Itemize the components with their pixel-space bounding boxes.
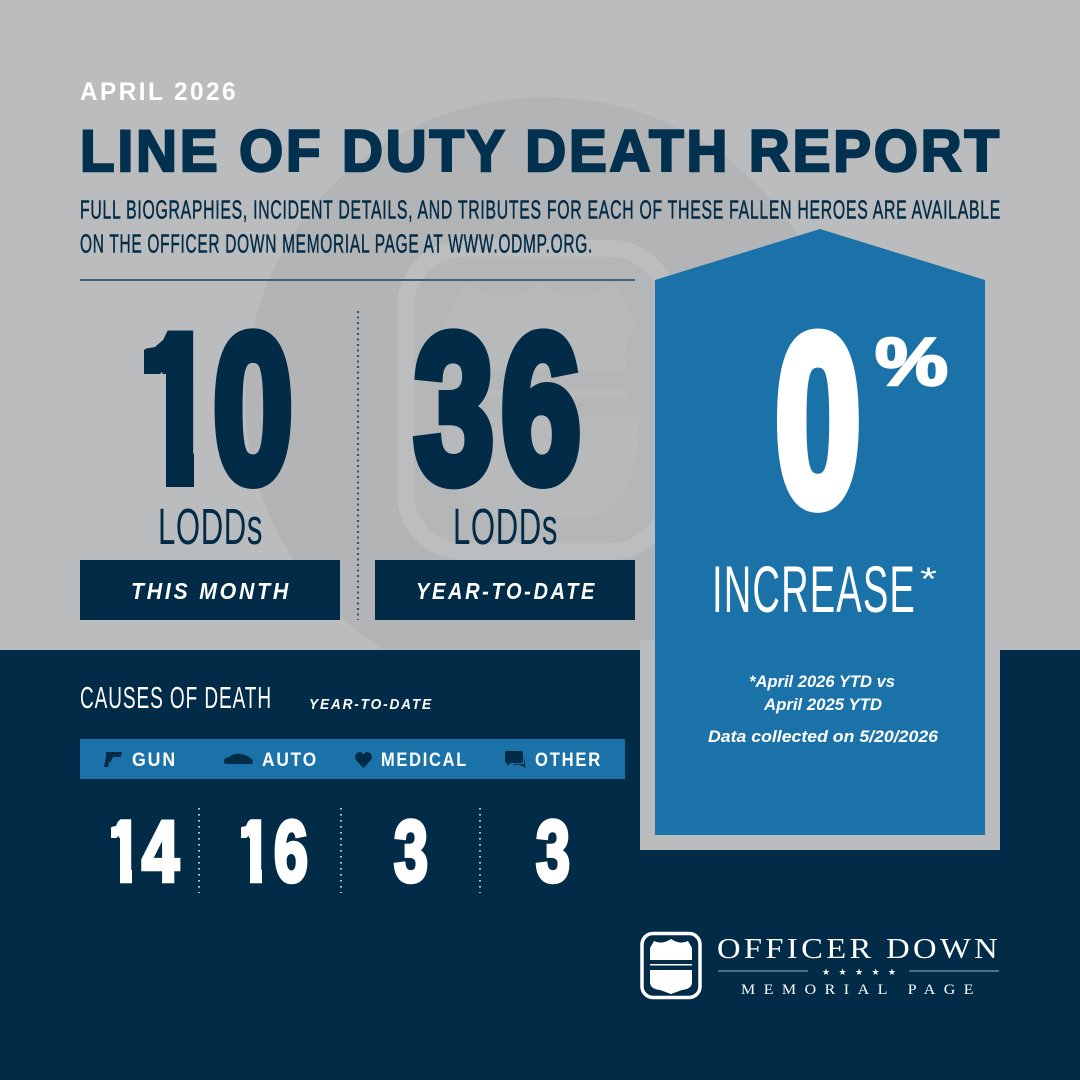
causes legend bar bbox=[80, 739, 625, 779]
watermark: badge emblem bbox=[245, 97, 845, 697]
panel backing bbox=[640, 640, 1000, 850]
logo: OFFICER DOWN bbox=[717, 933, 1001, 965]
causes counts: 3 bbox=[536, 804, 570, 900]
causes heading: CAUSES OF DEATH bbox=[80, 680, 272, 715]
stat: this month: THIS MONTH bbox=[131, 578, 291, 604]
intro text bbox=[80, 194, 1001, 258]
stat: year-to-date: 6 bbox=[501, 291, 581, 526]
icon: heart bbox=[355, 752, 372, 768]
title: LINE OF DUTY DEATH REPORT bbox=[80, 119, 1002, 184]
stat: this month bbox=[80, 328, 340, 620]
panel: year-over-year change: % bbox=[875, 324, 948, 400]
stat: this month: 0 bbox=[213, 291, 293, 526]
panel: year-over-year change: INCREASE bbox=[712, 552, 916, 626]
icon: badge bbox=[642, 934, 700, 998]
causes counts bbox=[111, 818, 570, 884]
logo bbox=[642, 933, 1001, 998]
causes legend bar: OTHER bbox=[535, 750, 602, 771]
panel: year-over-year change bbox=[655, 229, 985, 835]
icon: chat bubbles bbox=[505, 751, 526, 768]
panel: year-over-year change: *April 2026 YTD vs bbox=[749, 672, 895, 691]
causes legend bar: AUTO bbox=[262, 750, 318, 771]
causes legend bar: GUN bbox=[132, 750, 177, 771]
stat: year-to-date bbox=[375, 291, 635, 620]
icon: gun bbox=[104, 752, 122, 767]
causes heading: YEAR-TO-DATE bbox=[309, 696, 433, 713]
intro text: ON THE OFFICER DOWN MEMORIAL PAGE AT WWW.ODMP.ORG. bbox=[80, 228, 593, 258]
panel: year-over-year change: Data collected on 5/20/2026 bbox=[708, 727, 939, 746]
causes counts: 1 bbox=[106, 804, 142, 900]
icon: car bbox=[224, 754, 253, 764]
stat: year-to-date: 3 bbox=[414, 291, 494, 526]
causes counts: 6 bbox=[274, 804, 308, 900]
panel: year-over-year change: 0 bbox=[775, 286, 861, 556]
causes counts: 4 bbox=[142, 804, 179, 900]
logo: ★★★★★ bbox=[822, 967, 896, 977]
logo: MEMORIAL PAGE bbox=[741, 982, 982, 998]
bottom navy panel bbox=[0, 650, 1080, 1080]
stat: year-to-date: YEAR-TO-DATE bbox=[416, 578, 597, 604]
stat: year-to-date: LODDs bbox=[453, 498, 558, 555]
panel: year-over-year change: April 2025 YTD bbox=[763, 695, 882, 714]
date label: APRIL 2026 bbox=[80, 78, 238, 106]
causes legend bar: MEDICAL bbox=[381, 750, 468, 771]
causes counts: 1 bbox=[236, 804, 272, 900]
causes counts: 3 bbox=[394, 804, 428, 900]
stat: this month: LODDs bbox=[158, 498, 263, 555]
panel: year-over-year change: * bbox=[920, 561, 937, 597]
stat: this month: 1 bbox=[130, 291, 218, 526]
